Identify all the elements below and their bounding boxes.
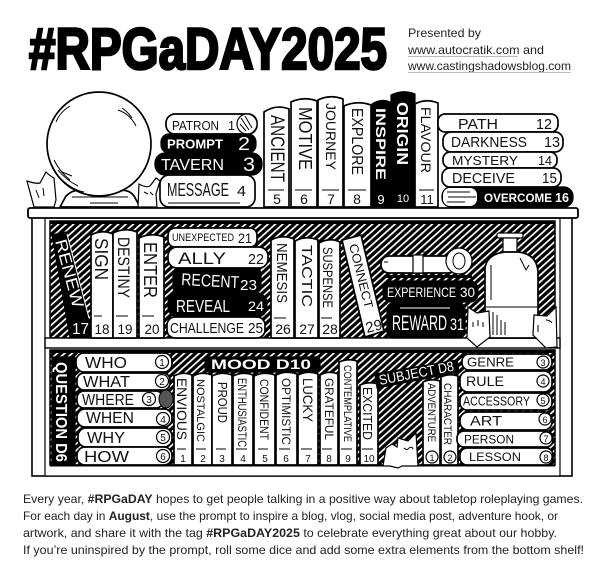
book: who: WHO <box>85 355 127 372</box>
book: flavour: 11 <box>420 192 434 207</box>
book: why: 5 <box>160 433 166 444</box>
book: connect <box>342 235 384 337</box>
book: adventure <box>423 380 440 465</box>
book: motive: MOTIVE <box>295 107 315 170</box>
book: envious <box>174 373 192 465</box>
book: grateful: GRATEFUL <box>322 378 336 440</box>
book: origin <box>391 92 415 207</box>
book: suspense: 28 <box>322 321 338 337</box>
book: origin: ORIGIN <box>393 102 410 165</box>
book: rule <box>460 371 552 392</box>
book: reveal: REVEAL <box>176 296 230 316</box>
book: reward <box>387 303 465 338</box>
book: challenge: CHALLENGE <box>170 320 244 337</box>
book: deceive: 15 <box>542 171 557 187</box>
book: inspire: 9 <box>377 192 385 207</box>
book: proud <box>212 373 232 465</box>
book: motive: 6 <box>300 191 308 207</box>
book: confident: CONFIDENT <box>257 379 271 441</box>
book: darkness: DARKNESS <box>451 135 527 151</box>
book: character: 2 <box>447 453 453 463</box>
book: reward: REWARD <box>392 312 447 335</box>
book: tavern: TAVERN <box>161 157 224 174</box>
book: person: 7 <box>543 434 549 444</box>
bookcase frame <box>28 208 578 476</box>
book: prompt: 2 <box>238 134 250 154</box>
book: destiny <box>113 230 137 338</box>
book: deceive <box>442 168 561 187</box>
book: genre: GENRE <box>467 356 514 370</box>
book: overcome <box>442 187 573 207</box>
intro paragraph <box>23 492 584 557</box>
credits text block: www.autocratik.com and <box>407 44 544 57</box>
book: mystery <box>443 152 557 168</box>
book: enter: 20 <box>144 321 160 337</box>
book: optimistic <box>276 372 297 465</box>
book: when: WHEN <box>86 410 134 427</box>
book: prompt: PROMPT <box>167 136 223 152</box>
book: enter <box>139 235 164 338</box>
book: contemplative: 9 <box>345 454 351 465</box>
book: experience: 30 <box>460 284 475 300</box>
book: genre: 3 <box>540 358 546 368</box>
book: motive <box>291 99 317 207</box>
book: art: ART <box>470 412 503 428</box>
book: recent: RECENT <box>181 270 240 292</box>
book: sign: SIGN <box>91 238 111 280</box>
book: unexpected: 21 <box>238 230 252 246</box>
credits text block: Presented by <box>408 27 481 40</box>
book: deceive: DECEIVE <box>452 171 515 187</box>
book: excited: 10 <box>363 454 375 465</box>
book: when <box>77 409 172 427</box>
book: how <box>77 447 172 466</box>
book: enthusiastic: ENTHUSIASTIC <box>235 378 249 447</box>
book: art: 6 <box>542 415 548 425</box>
book: suspense <box>319 240 340 338</box>
book: who <box>76 353 172 372</box>
book: what: 2 <box>159 377 165 388</box>
book: envious: 1 <box>180 454 186 465</box>
book: patron: 1 <box>228 118 235 133</box>
book: mystery: MYSTERY <box>452 153 518 168</box>
book: excited: EXCITED <box>360 387 374 440</box>
book: proud: PROUD <box>215 382 229 423</box>
book: mood d10 <box>205 356 320 372</box>
book: journey: JOURNEY <box>323 103 339 171</box>
book: nostalgic: 2 <box>200 454 206 465</box>
book: experience: EXPERIENCE <box>387 284 456 300</box>
book: adventure: ADVENTURE <box>425 383 437 442</box>
book: nostalgic: NOSTALGIC <box>194 379 206 442</box>
book: message <box>160 175 255 207</box>
intro paragraph: Every year, #RPGaDAY hopes to get people talking in a positive way about tabletop roleplaying games. <box>23 492 583 506</box>
book: unexpected <box>168 228 257 247</box>
intro paragraph: For each day in August, use the prompt to inspire a blog, vlog, social media post, adventure hook, or <box>23 509 558 523</box>
book: tactic <box>295 238 318 338</box>
book: confident: 5 <box>262 454 268 465</box>
book: lucky <box>298 372 318 465</box>
book: what: WHAT <box>83 374 131 391</box>
book: where: WHERE <box>82 392 134 409</box>
book: message: 4 <box>237 183 246 200</box>
book: darkness: 13 <box>544 135 560 151</box>
book: lesson: LESSON <box>469 450 521 464</box>
book: message: MESSAGE <box>167 180 229 200</box>
book: lesson: 8 <box>543 453 549 463</box>
book: inspire: INSPIRE <box>373 108 389 180</box>
book: renew: 17 <box>72 321 89 338</box>
intro paragraph: If you’re uninspired by the prompt, roll some dice and add some extra elements from the bottom shelf! <box>23 543 584 557</box>
book: optimistic: OPTIMISTIC <box>279 378 291 445</box>
book: grateful: 8 <box>326 454 332 465</box>
book: confident <box>254 373 275 465</box>
book: tactic: TACTIC <box>298 245 315 307</box>
icon: crystal ball <box>47 92 151 207</box>
book: ally: ALLY <box>178 250 226 268</box>
book: character <box>441 375 458 465</box>
title: #RPGaDAY2025 <box>29 17 387 82</box>
book: mood d10: MOOD D10 <box>211 356 311 372</box>
book: journey: 7 <box>327 191 335 207</box>
book: proud: 3 <box>219 454 225 465</box>
book: ally <box>168 247 268 268</box>
book: how: HOW <box>84 449 129 466</box>
book: destiny: DESTINY <box>114 237 133 298</box>
book: contemplative: CONTEMPLATIVE <box>341 365 353 442</box>
icon: bottle <box>485 233 538 338</box>
book: art <box>460 412 552 430</box>
book: explore: 8 <box>353 191 361 207</box>
book: prompt <box>161 134 256 154</box>
book: patron: PATRON <box>172 118 219 133</box>
book: darkness <box>443 132 563 152</box>
book: reveal: 24 <box>248 298 264 314</box>
book: sign <box>91 232 113 338</box>
book: accessory: ACCESSORY <box>463 394 530 408</box>
book: explore: EXPLORE <box>348 108 365 175</box>
book: connect: CONNECT <box>346 242 376 310</box>
book: connect: 29 <box>364 316 384 337</box>
book: optimistic: 6 <box>283 454 289 465</box>
book: tactic: 27 <box>299 321 315 337</box>
icon: small cats <box>383 433 418 468</box>
book: journey <box>318 97 343 207</box>
book: path <box>438 114 558 133</box>
book: reveal <box>168 293 267 317</box>
book: grateful <box>320 372 338 465</box>
book: enthusiastic <box>233 373 253 465</box>
credits text block <box>407 27 571 73</box>
book: unexpected: UNEXPECTED <box>172 232 234 244</box>
book: suspense: SUSPENSE <box>320 247 336 308</box>
book: nemesis: NEMESIS <box>273 243 290 303</box>
book: enter: ENTER <box>140 242 160 298</box>
book: when: 4 <box>160 415 166 426</box>
intro paragraph: artwork, and share it with the tag #RPGaDAY2025 to celebrate everything great about our hobby. <box>23 526 557 540</box>
book: how: 6 <box>160 452 166 463</box>
book: adventure: 1 <box>429 453 435 463</box>
book: nemesis <box>271 237 294 338</box>
icon: cat on shelf left <box>467 307 490 347</box>
book: origin: 10 <box>397 193 409 205</box>
book: path: 12 <box>536 117 552 133</box>
book: enthusiastic: 4 <box>240 454 246 465</box>
book: nostalgic <box>193 373 212 465</box>
icon: right cat <box>138 178 160 207</box>
book: explore <box>344 103 371 207</box>
book: reward: 31 <box>450 315 464 334</box>
book: nemesis: 26 <box>275 321 291 337</box>
book: overcome: OVERCOME <box>484 191 552 205</box>
book: character: CHARACTER <box>441 383 453 445</box>
book: rule: RULE <box>466 373 504 389</box>
icon: scroll <box>381 248 472 278</box>
book: subject d8: SUBJECT D8 <box>378 358 455 388</box>
book: question d6: QUESTION D6 <box>52 362 69 462</box>
book: rule: 4 <box>540 377 546 387</box>
book: destiny: 19 <box>118 321 133 337</box>
book: why: WHY <box>87 430 125 447</box>
book: where <box>77 390 173 409</box>
book: path: PATH <box>458 117 498 133</box>
book: overcome: 16 <box>555 190 569 205</box>
book: who: 1 <box>159 358 165 369</box>
book: ally: 22 <box>248 251 264 268</box>
book: inspire <box>372 100 390 207</box>
book: excited <box>360 383 378 465</box>
book: question d6 <box>52 357 75 465</box>
book: renew <box>51 232 93 338</box>
book: genre <box>462 354 552 370</box>
book: tavern: 3 <box>243 155 255 176</box>
book: lesson <box>460 448 553 465</box>
book: accessory: 5 <box>540 396 546 406</box>
book: where: 3 <box>146 395 152 406</box>
icon: cat on shelf right <box>533 307 557 348</box>
book: renew: RENEW <box>51 237 87 310</box>
book: person: PERSON <box>464 432 514 446</box>
book: mystery: 14 <box>538 153 552 168</box>
book: what <box>77 373 170 391</box>
book: recent: 23 <box>240 277 257 294</box>
book: contemplative <box>339 360 357 465</box>
book: lucky: 7 <box>305 454 311 465</box>
book: flavour <box>415 101 438 207</box>
icon: left cat <box>27 172 56 207</box>
book: flavour: FLAVOUR <box>418 107 434 173</box>
credits text block: www.castingshadowsblog.com <box>407 60 571 73</box>
book: person <box>457 431 553 447</box>
book: envious: ENVIOUS <box>174 378 190 440</box>
book: challenge: 25 <box>248 320 263 337</box>
book: sign: 18 <box>94 321 110 337</box>
book: patron <box>166 114 257 134</box>
book: why <box>78 428 172 447</box>
book: ancient: ANCIENT <box>266 115 287 182</box>
book: ancient: 5 <box>273 191 281 207</box>
book: tavern <box>155 153 262 176</box>
book: lucky: LUCKY <box>300 378 316 423</box>
